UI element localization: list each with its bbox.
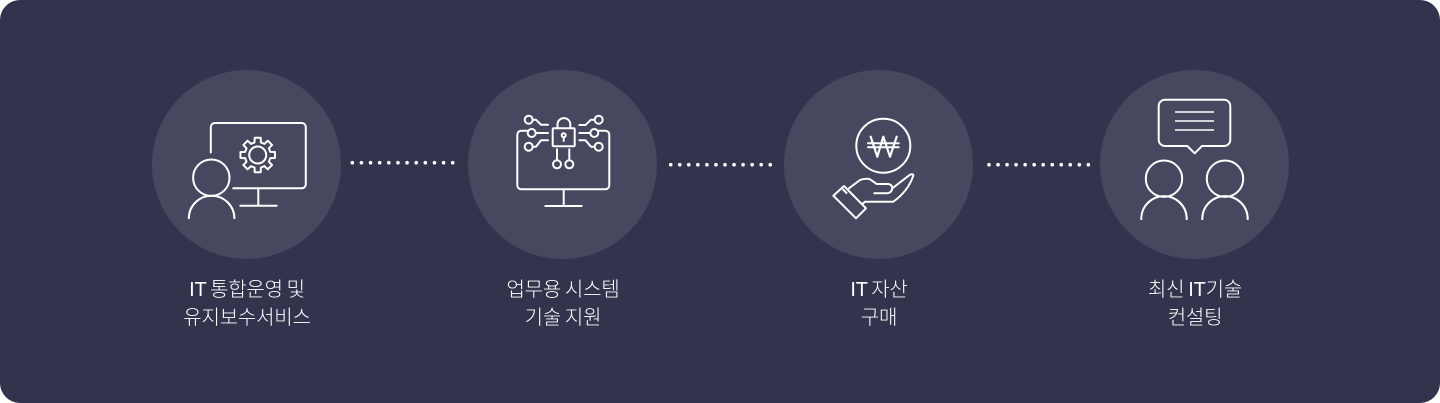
label: latest IT consulting xyxy=(1148,279,1242,329)
icon: hand holding won coin xyxy=(833,119,913,218)
label: IT integrated operation: 유지보수서비스 xyxy=(183,307,311,329)
label: IT asset purchase xyxy=(850,279,908,329)
icon: person at monitor with gear xyxy=(189,123,306,219)
step: business system support xyxy=(468,70,657,329)
label: latest IT consulting: 최신 IT기술 xyxy=(1148,279,1242,301)
step: latest IT consulting xyxy=(1100,70,1289,329)
icon: monitor with lock and circuit xyxy=(517,116,609,206)
label: IT asset purchase: IT 자산 xyxy=(850,279,908,301)
label: business system support xyxy=(506,279,620,329)
icon: two people with speech bubble xyxy=(1141,100,1248,220)
label: business system support: 기술 지원 xyxy=(525,307,601,329)
label: latest IT consulting: 컨설팅 xyxy=(1168,307,1222,329)
label: IT integrated operation xyxy=(183,279,311,329)
label: IT integrated operation: IT 통합운영 및 xyxy=(189,279,305,301)
label: business system support: 업무용 시스템 xyxy=(506,279,620,301)
step: IT integrated operation xyxy=(152,70,341,329)
step: IT asset purchase xyxy=(784,70,973,329)
label: IT asset purchase: 구매 xyxy=(861,307,897,329)
